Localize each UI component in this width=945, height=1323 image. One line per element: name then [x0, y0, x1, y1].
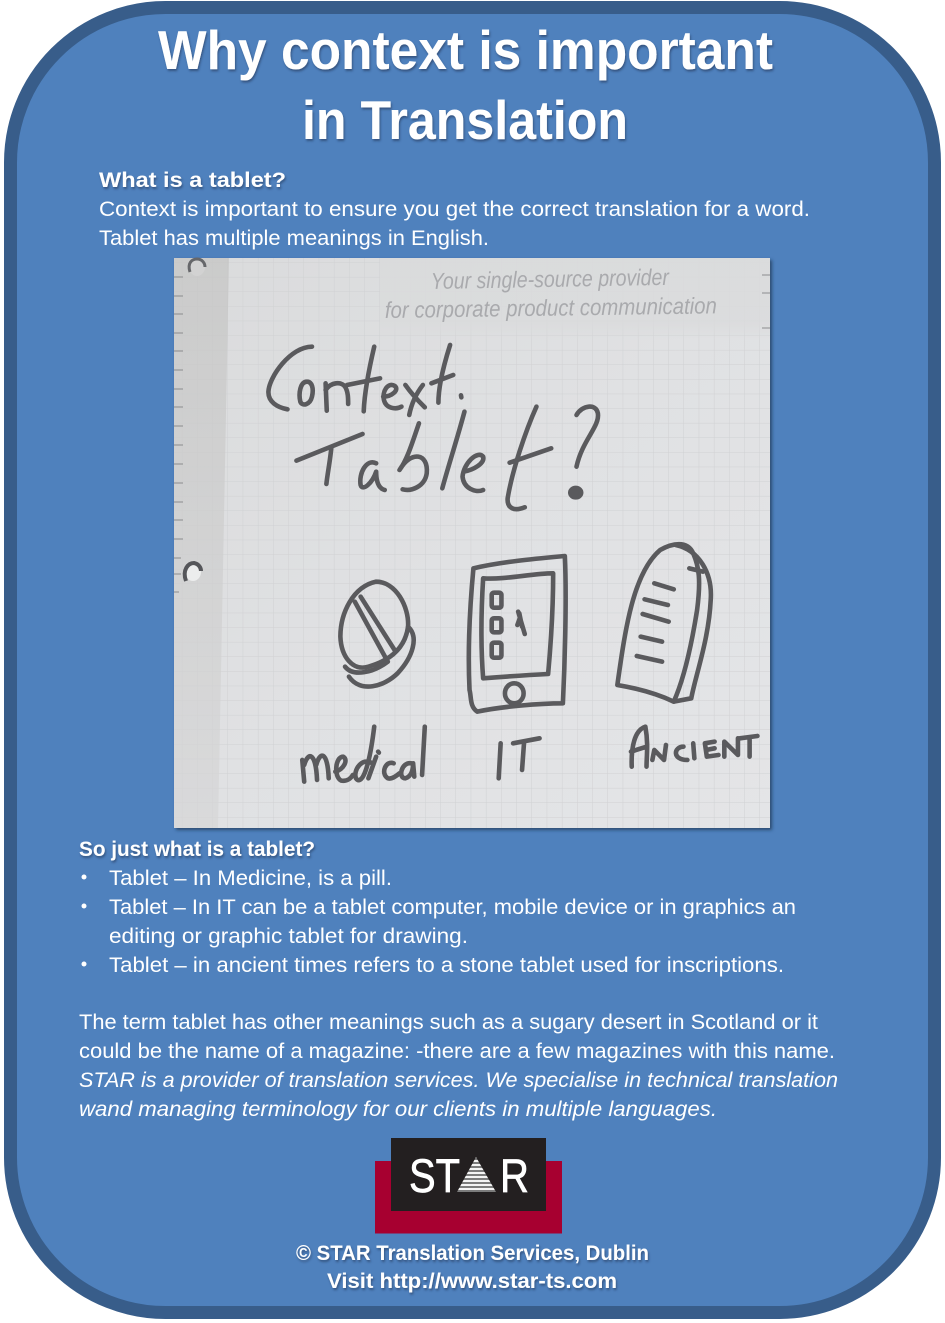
title: in Translation [302, 89, 628, 151]
punched holes [185, 258, 205, 581]
text block: other meanings: could be the name of a magazine: -there are a few magazines with this name. [79, 1039, 835, 1063]
printed slogan: Your single-source provider [431, 264, 670, 294]
text block: about STAR: wand managing terminology for our clients in multiple languages. [79, 1097, 717, 1121]
printed slogan [385, 264, 717, 323]
label: Medical [302, 727, 425, 782]
margin ticks [174, 275, 770, 592]
bullet: IT: editing or graphic tablet for drawing. [109, 924, 468, 948]
label: IT [499, 738, 540, 778]
bullet: IT [82, 895, 796, 948]
text block: other meanings: The term tablet has other meanings such as a sugary desert in Scotland or it [79, 1010, 818, 1034]
logo: STAR [375, 1138, 562, 1234]
subheading: So just what is a tablet? [79, 837, 315, 861]
footer credits: © STAR Translation Services, Dublin [296, 1241, 649, 1265]
logo: STAR: R [500, 1149, 529, 1202]
footer credits: Visit http://www.star-ts.com [327, 1269, 617, 1293]
paper sheet [174, 258, 770, 828]
tablet computer icon [469, 556, 566, 712]
logo: STAR: ST [409, 1149, 460, 1202]
photo: handwritten notepad sketch [174, 258, 770, 828]
intro text block [99, 168, 810, 250]
title: Why context is important [158, 19, 773, 81]
text block: other meanings [79, 1010, 835, 1063]
label: Ancient [631, 727, 757, 767]
sketch: pill, tablet computer, stone tablet with labels [302, 544, 757, 782]
grid [174, 258, 770, 828]
intro line two: Tablet has multiple meanings in English. [99, 226, 489, 250]
handwriting: Context. Tablet? [268, 345, 598, 509]
footer credits [296, 1241, 649, 1293]
bullet: IT: Tablet – In IT can be a tablet computer, mobile device or in graphics an [109, 895, 796, 919]
intro line one: Context is important to ensure you get the correct translation for a word. [99, 197, 810, 221]
text block: so just what is a tablet [79, 837, 796, 977]
bullet: ancient: Tablet – in ancient times refers to a stone tablet used for inscriptions. [109, 953, 784, 977]
printed slogan: for corporate product communication [385, 292, 717, 323]
printed header fading the grid [380, 258, 770, 340]
pill icon [340, 582, 414, 687]
text block: about STAR: STAR is a provider of translation services. We specialise in technical translation [79, 1068, 838, 1092]
heading: what is a tablet: What is a tablet? [99, 168, 286, 192]
title [158, 19, 773, 151]
stone tablet icon [617, 544, 711, 702]
binding band [174, 258, 229, 828]
text block: about STAR [79, 1068, 838, 1121]
bullet: medicine: Tablet – In Medicine, is a pill. [109, 866, 392, 890]
